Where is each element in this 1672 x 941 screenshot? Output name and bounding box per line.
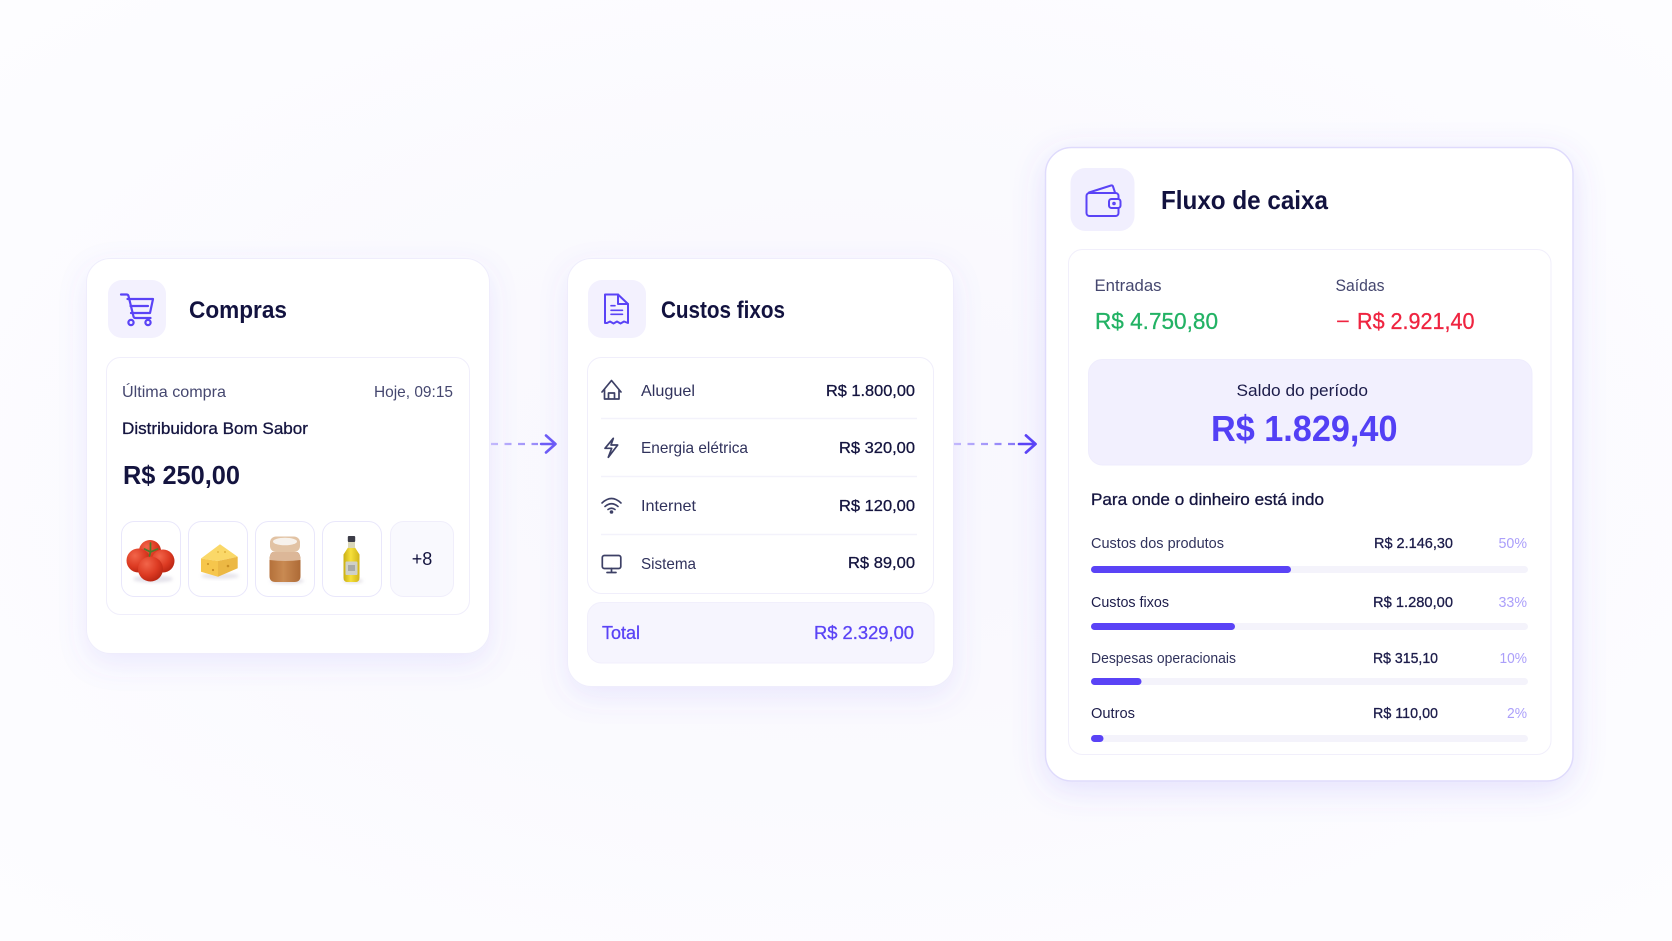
- panel: Custos fixos: [568, 258, 954, 686]
- row: Outros: Outros: [1091, 705, 1135, 722]
- icon: wallet: [1070, 168, 1134, 231]
- panel: última compra: [106, 358, 470, 614]
- text: Hoje, 09:15: Hoje, 09:15: [374, 384, 453, 401]
- row: Despesas operacionais: [1091, 650, 1528, 685]
- row: Aluguel: Aluguel: [641, 383, 695, 400]
- row: Custos dos produtos: 50%: [1498, 535, 1527, 552]
- text: Entradas: [1094, 277, 1218, 334]
- panel: Compras: [86, 258, 490, 654]
- row: Outros: [1091, 705, 1528, 742]
- panel: expenses list: [588, 358, 934, 594]
- panel: Fluxo de caixa: [1046, 148, 1573, 781]
- row: Despesas operacionais: R$ 315,10: [1373, 650, 1438, 667]
- panel: cash flow details: [1068, 250, 1551, 754]
- icon: receipt: [588, 280, 646, 338]
- text: supplier name: Distribuidora Bom Sabor: [122, 419, 308, 438]
- thumbnail: cheese: [188, 522, 248, 596]
- heading: Fluxo de caixa: Fluxo de caixa: [1161, 185, 1328, 215]
- row: Aluguel: R$ 1.800,00: [826, 383, 915, 400]
- text: Saídas: −: [1336, 308, 1350, 334]
- thumbnail: tomatoes: [122, 522, 180, 596]
- row: Sistema: Sistema: [641, 556, 696, 573]
- text: Saídas: Saídas: [1336, 277, 1384, 295]
- row: Despesas operacionais: Despesas operacionais: [1091, 650, 1236, 667]
- panel: total: R$ 2.329,00: [814, 623, 914, 643]
- row: Custos fixos: Custos fixos: [1091, 594, 1169, 611]
- thumbnail: jar: [256, 522, 314, 596]
- arrow: Compras to Custos fixos: [491, 436, 556, 452]
- row: Sistema: R$ 89,00: [848, 555, 915, 572]
- bar chart: spending breakdown: [1091, 535, 1528, 742]
- panel: Saldo do período: Saldo do período: [1236, 381, 1368, 400]
- text: Entradas: R$ 4.750,80: [1095, 308, 1218, 334]
- row: Despesas operacionais: 10%: [1500, 650, 1527, 667]
- row: Aluguel: [602, 380, 915, 400]
- thumbnail: more items: +8: [412, 549, 432, 569]
- heading: Para onde o dinheiro está indo: Para onde o dinheiro está indo: [1091, 490, 1324, 509]
- panel: Saldo do período: R$ 1.829,40: [1211, 408, 1398, 449]
- row: Custos fixos: 33%: [1498, 594, 1527, 611]
- row: Custos dos produtos: [1091, 535, 1528, 573]
- row: Energia elétrica: [605, 438, 915, 457]
- row: Custos dos produtos: R$ 2.146,30: [1374, 535, 1453, 552]
- row: Internet: Internet: [641, 498, 697, 515]
- row: Sistema: [602, 555, 915, 573]
- row: Custos fixos: R$ 1.280,00: [1373, 594, 1453, 611]
- row: Outros: 2%: [1507, 705, 1527, 722]
- thumbnail: oil bottle: [322, 522, 382, 596]
- panel: total: [588, 602, 934, 663]
- row: Energia elétrica: R$ 320,00: [839, 440, 915, 457]
- panel: total: Total: [602, 623, 640, 643]
- text: Última compra: Última compra: [122, 382, 226, 401]
- heading: Compras: Compras: [189, 297, 287, 324]
- row: Custos fixos: [1091, 594, 1528, 630]
- row: Energia elétrica: Energia elétrica: [641, 440, 748, 457]
- row: Internet: [602, 498, 915, 515]
- arrow: Custos fixos to Fluxo de caixa: [954, 436, 1036, 452]
- heading: Custos fixos: Custos fixos: [661, 297, 785, 324]
- row: Outros: R$ 110,00: [1373, 705, 1438, 722]
- row: Custos dos produtos: Custos dos produtos: [1091, 535, 1224, 552]
- text: purchase amount: R$ 250,00: [123, 460, 240, 490]
- icon: shopping cart: [108, 280, 166, 338]
- text: Saídas: R$ 2.921,40: [1357, 308, 1474, 334]
- thumbnail: more items: [390, 522, 454, 596]
- text: Entradas: Entradas: [1094, 277, 1162, 295]
- text: Saídas: [1336, 277, 1474, 334]
- panel: Saldo do período: [1088, 360, 1532, 465]
- row: Internet: R$ 120,00: [839, 498, 915, 515]
